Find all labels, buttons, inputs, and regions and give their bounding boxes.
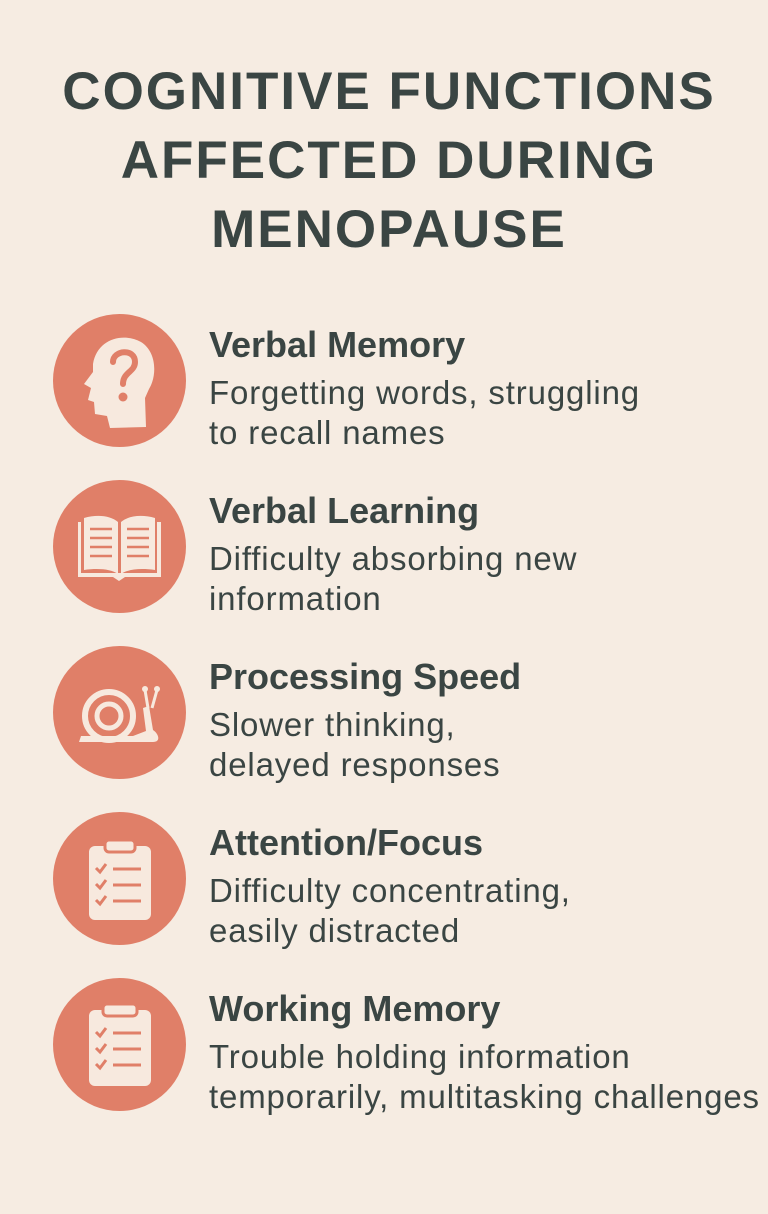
item: verbal learning bbox=[53, 480, 577, 617]
title: MENOPAUSE bbox=[211, 200, 567, 259]
description: delayed responses bbox=[209, 746, 500, 783]
description bbox=[209, 1038, 760, 1115]
icon: head with question mark bbox=[53, 314, 186, 447]
description: Difficulty concentrating, bbox=[209, 872, 571, 909]
description bbox=[209, 374, 640, 451]
icon: checklist bbox=[53, 978, 186, 1111]
description bbox=[209, 872, 571, 949]
title bbox=[62, 62, 716, 259]
heading: Attention/Focus bbox=[209, 822, 483, 863]
description: Slower thinking, bbox=[209, 706, 456, 743]
icon: open book bbox=[53, 480, 186, 613]
description: easily distracted bbox=[209, 912, 460, 949]
description: to recall names bbox=[209, 414, 446, 451]
description: Forgetting words, struggling bbox=[209, 374, 640, 411]
item: working memory bbox=[53, 978, 760, 1115]
item: verbal memory bbox=[53, 314, 640, 451]
icon: clipboard bbox=[53, 812, 186, 945]
description: Trouble holding information bbox=[209, 1038, 631, 1075]
title: AFFECTED DURING bbox=[121, 131, 657, 190]
title: COGNITIVE FUNCTIONS bbox=[62, 62, 716, 121]
icon: snail bbox=[53, 646, 186, 779]
description: information bbox=[209, 580, 382, 617]
heading: Verbal Learning bbox=[209, 490, 479, 531]
heading: Verbal Memory bbox=[209, 324, 465, 365]
description: temporarily, multitasking challenges bbox=[209, 1078, 760, 1115]
item: processing speed bbox=[53, 646, 521, 783]
heading: Processing Speed bbox=[209, 656, 521, 697]
item: attention/focus bbox=[53, 812, 571, 949]
heading: Working Memory bbox=[209, 988, 500, 1029]
description: Difficulty absorbing new bbox=[209, 540, 577, 577]
description bbox=[209, 706, 500, 783]
description bbox=[209, 540, 577, 617]
